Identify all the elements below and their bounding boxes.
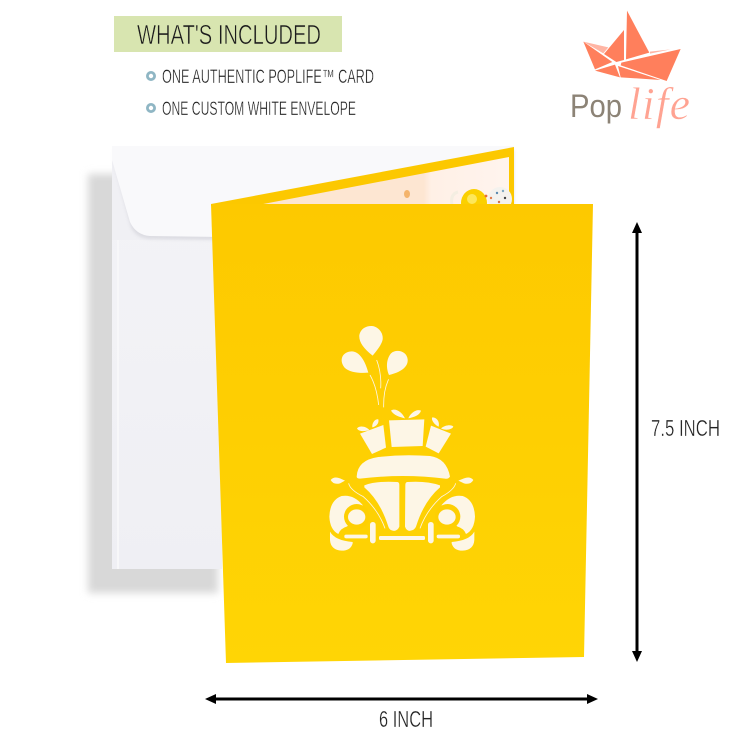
bumper bbox=[379, 536, 425, 540]
heading: what's included bbox=[114, 16, 342, 52]
envelope shadow bbox=[88, 174, 218, 593]
list: included items bbox=[147, 67, 374, 120]
popup peek bbox=[452, 187, 512, 217]
car body bbox=[331, 455, 473, 531]
right fender and headlight bbox=[428, 496, 475, 551]
list: included items: ONE AUTHENTIC POPLIFE™ CARD bbox=[162, 67, 374, 88]
arrow: width bbox=[205, 694, 598, 704]
left fender and headlight bbox=[329, 496, 376, 551]
card back panel bbox=[211, 147, 514, 217]
gifts bbox=[357, 410, 453, 454]
envelope bbox=[112, 146, 514, 569]
balloons bbox=[342, 326, 408, 407]
logo: poplife: Pop bbox=[570, 88, 622, 124]
heading: what's included: WHAT'S INCLUDED bbox=[137, 19, 321, 50]
arrow: height bbox=[632, 222, 642, 662]
logo: poplife bbox=[570, 11, 690, 129]
card front bbox=[211, 204, 593, 663]
logo: poplife: life bbox=[628, 78, 690, 129]
label: 6 inch: 6 INCH bbox=[379, 706, 433, 732]
list: included items: ONE CUSTOM WHITE ENVELOPE bbox=[162, 99, 356, 120]
cutout: balloons, gifts and car bbox=[329, 326, 475, 551]
